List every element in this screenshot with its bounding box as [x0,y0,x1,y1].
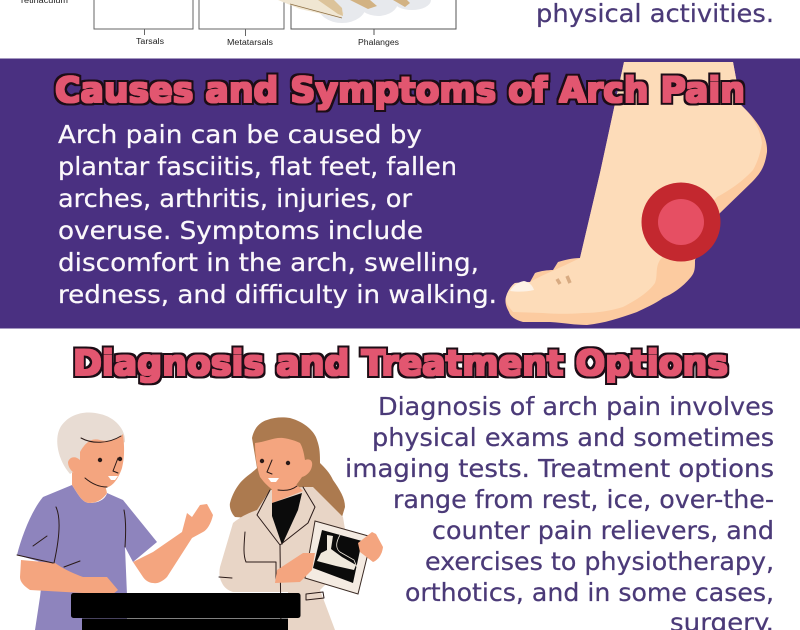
doctor hand holding x-ray [358,532,383,562]
redaction bar: lower [82,618,288,630]
illustration: patient [17,413,213,630]
x-ray foot bones [317,535,356,570]
bracket: tarsals [94,0,193,35]
x-ray film [313,530,362,583]
label: phalanges: Phalanges [358,38,399,47]
illustration: doctor [219,417,383,630]
doctor black top [272,493,302,545]
text block: causes and symptoms: Arch pain can be caused by [58,120,422,149]
patient right arm and hand [133,504,213,583]
panel: causes and symptoms [0,58,800,328]
patient shirt creases [17,507,126,567]
patient facial details [81,436,122,487]
bracket: phalanges [291,0,456,35]
text block: causes and symptoms: discomfort in the arch, swelling, [58,248,479,277]
patient shirt [17,485,157,630]
patient left arm and hand [20,560,118,594]
x-ray panel [305,521,372,594]
doctor neck [272,484,303,503]
text block: causes and symptoms: plantar fasciitis, flat feet, fallen [58,152,457,181]
patient face [68,434,124,488]
text block: diagnosis and treatment: orthotics, and in some cases, [405,578,774,607]
pain point centre [658,199,704,245]
label: tarsals: Tarsals [136,37,164,46]
redaction bar: upper [71,593,300,618]
bracket: metatarsals [199,0,284,36]
heading: diagnosis and treatment: Diagnosis and Treatment Options [73,344,728,384]
toe creases [557,276,570,284]
text block: causes and symptoms: redness, and difficulty in walking. [58,280,497,309]
patient hair [57,413,125,474]
foot shadow [505,62,767,325]
x-ray foot outline [337,535,358,570]
icon: foot with pain point [505,62,767,325]
doctor hair [230,417,345,520]
text block: diagnosis and treatment: range from rest, ice, over-the- [393,485,774,514]
text block: diagnosis and treatment: Diagnosis of arch pain involves [378,392,774,421]
doctor face [255,438,312,490]
illustration: toe bones [278,0,431,23]
panel background [0,58,800,328]
toenail [510,281,534,292]
patient neck [72,472,107,503]
doctor lab coat [219,487,350,630]
doctor hand on x-ray [275,553,315,583]
label: metatarsals: Metatarsals [227,38,273,47]
text block: diagnosis and treatment: counter pain relievers, and [432,516,774,545]
x-ray frame [305,521,372,594]
doctor facial details [257,459,315,630]
text block: causes and symptoms: overuse. Symptoms include [58,216,423,245]
foot body [506,62,762,314]
panel: foot anatomy diagram [21,0,456,47]
text block: causes and symptoms: arches, arthritis, injuries, or [58,184,413,213]
lab coat creases [219,532,324,600]
heading: causes and symptoms: Causes and Symptoms of Arch Pain [55,71,745,111]
text block: causes and symptoms [58,120,497,309]
text block: diagnosis and treatment: exercises to physiotherapy, [425,547,774,576]
text block: diagnosis and treatment [345,392,774,630]
text block: diagnosis and treatment: physical exams and sometimes [372,423,774,452]
pain point outer ring [642,182,720,262]
text block: diagnosis and treatment: imaging tests. Treatment options [345,454,774,483]
